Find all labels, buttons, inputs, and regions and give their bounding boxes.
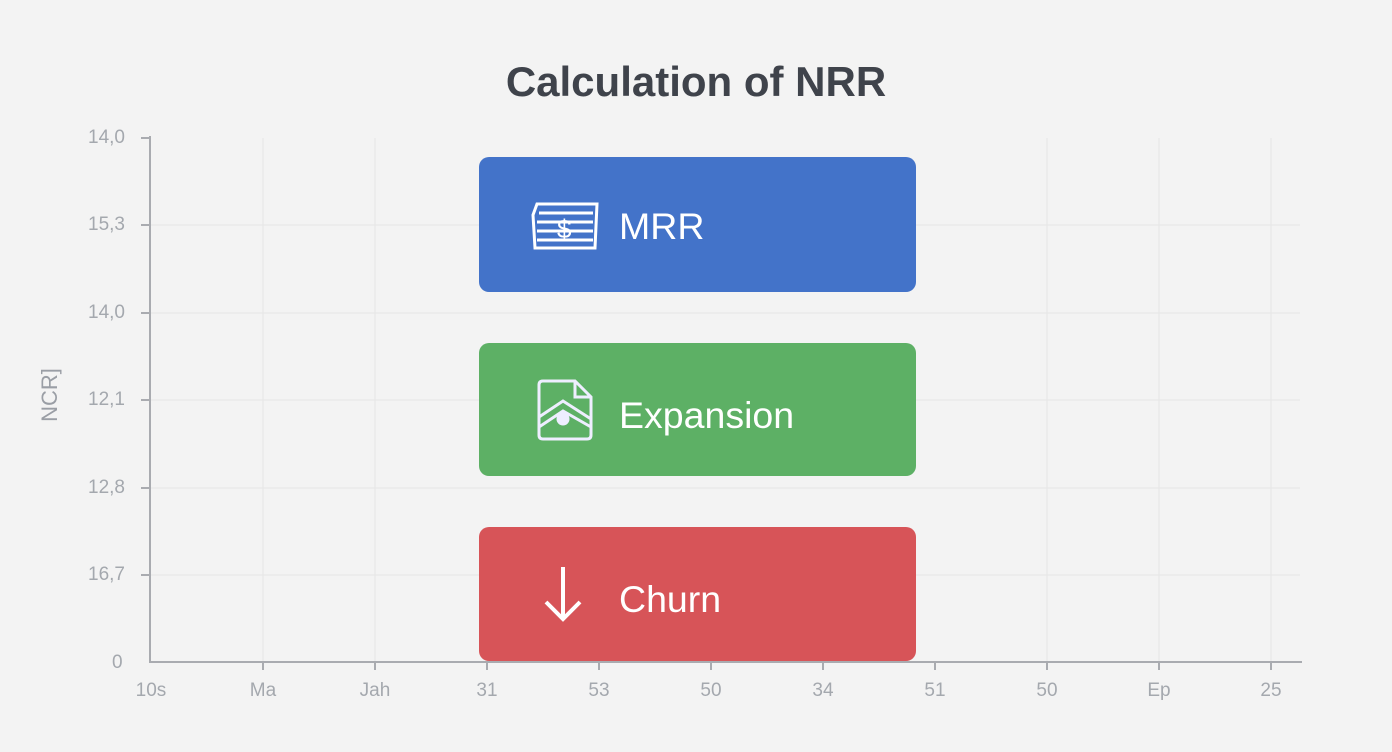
text: Jah bbox=[360, 680, 390, 701]
text: 0 bbox=[112, 652, 123, 673]
box: Churn bbox=[479, 527, 916, 661]
text: 34 bbox=[812, 680, 834, 701]
icon: money stack bbox=[532, 202, 599, 250]
x axis labels bbox=[136, 680, 1282, 701]
text: 25 bbox=[1260, 680, 1282, 701]
text: 15,3 bbox=[88, 214, 125, 235]
text: 10s bbox=[136, 680, 166, 701]
icon: money stack: $ bbox=[557, 214, 572, 244]
text: 50 bbox=[1036, 680, 1058, 701]
box: MRR: MRR bbox=[619, 205, 704, 247]
icon: document bbox=[538, 380, 592, 440]
text: 12,1 bbox=[88, 389, 125, 410]
text: 31 bbox=[476, 680, 498, 701]
title: Calculation of NRR bbox=[506, 58, 886, 105]
text: 53 bbox=[588, 680, 610, 701]
y axis labels bbox=[88, 127, 125, 673]
text: Ma bbox=[250, 680, 276, 701]
text: 51 bbox=[924, 680, 946, 701]
box: Expansion bbox=[479, 343, 916, 476]
y axis title: NCR] bbox=[37, 368, 62, 422]
box: Churn: Churn bbox=[619, 578, 721, 620]
text: 14,0 bbox=[88, 302, 125, 323]
icon: down arrow bbox=[544, 567, 582, 622]
text: 12,8 bbox=[88, 477, 125, 498]
text: 14,0 bbox=[88, 127, 125, 148]
text: 16,7 bbox=[88, 564, 125, 585]
box: MRR bbox=[479, 157, 916, 292]
text: 50 bbox=[700, 680, 722, 701]
box: Expansion: Expansion bbox=[619, 394, 794, 436]
text: Ep bbox=[1147, 680, 1171, 701]
